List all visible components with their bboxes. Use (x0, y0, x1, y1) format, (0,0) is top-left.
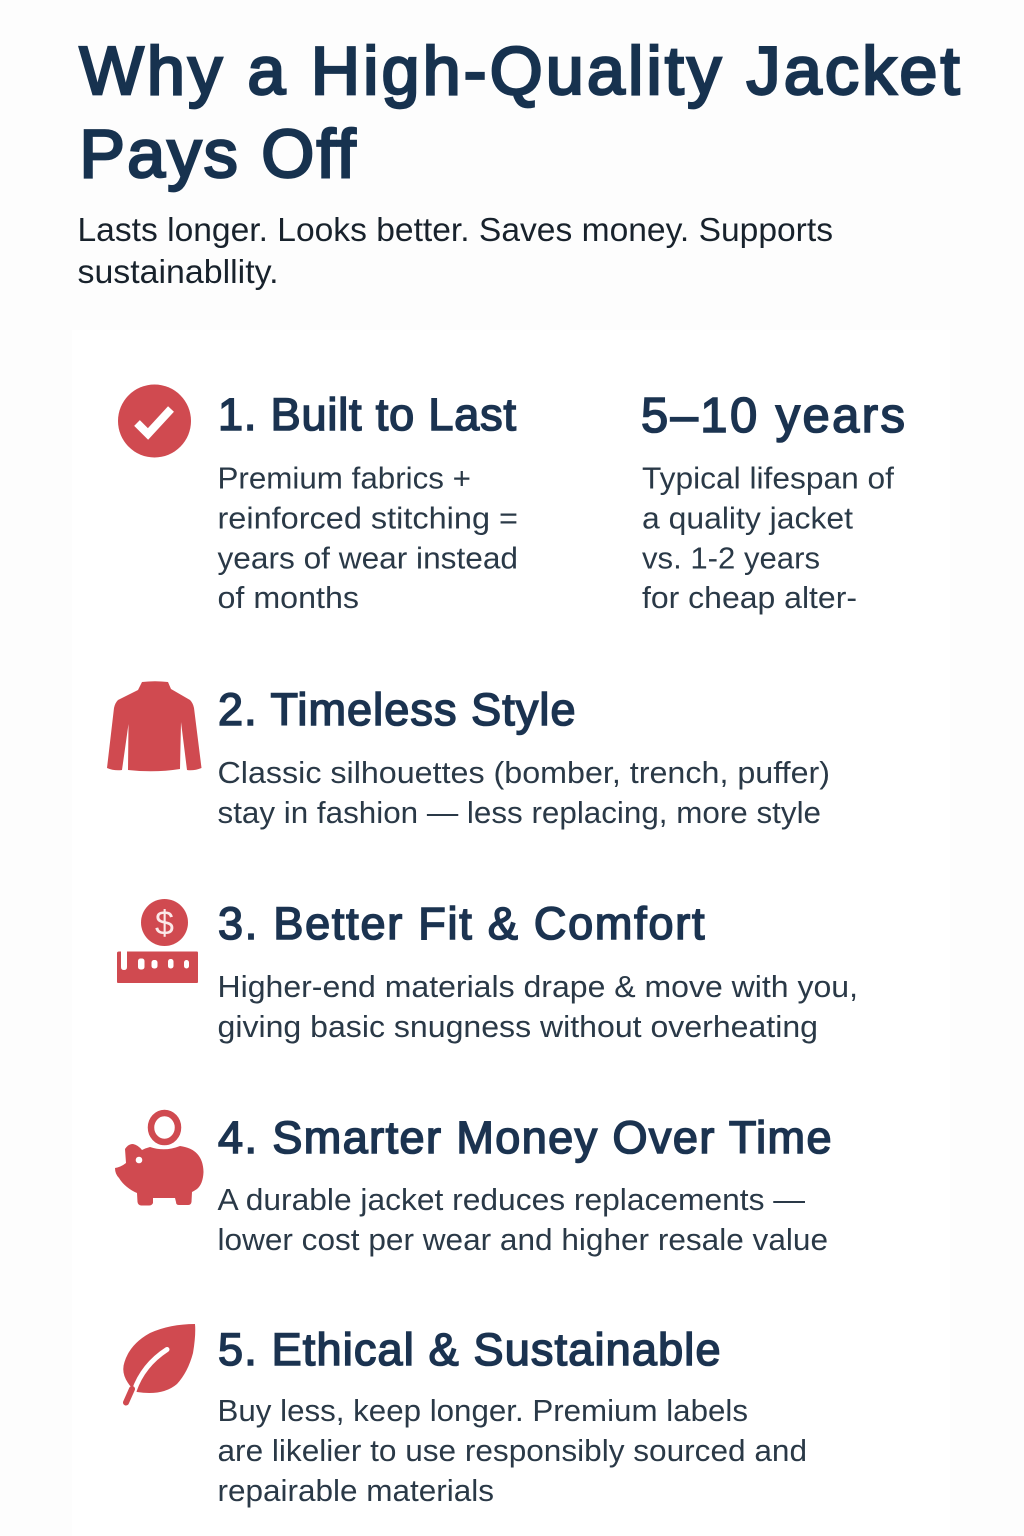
text 2: stay in fashion — less replacing, more style (218, 795, 821, 830)
text 3: giving basic snugness without overheating (218, 1009, 818, 1044)
stat text: for cheap alter- (642, 580, 857, 615)
icon: leaf (123, 1324, 195, 1402)
text 5 (218, 1393, 807, 1508)
text 1: reinforced stitching = (218, 500, 518, 536)
subtitle: Lasts longer. Looks better. Saves money. Supports (78, 211, 833, 248)
section 3: better fit (117, 898, 858, 1044)
panel: benefits (72, 330, 950, 1536)
stat heading: 5–10 years (641, 389, 905, 443)
section 2: timeless style (107, 681, 830, 830)
section 4: smarter money (115, 1112, 832, 1257)
icon: jacket (107, 681, 202, 771)
icon: piggy bank (115, 1113, 204, 1206)
section 5: sustainable (123, 1324, 807, 1508)
text 4: A durable jacket reduces replacements — (218, 1182, 805, 1217)
text 3 (218, 969, 858, 1044)
heading 5: 5. Ethical & Sustainable (218, 1324, 720, 1375)
text 5: are likelier to use responsibly sourced and (218, 1433, 807, 1468)
heading 4: 4. Smarter Money Over Time (218, 1112, 832, 1163)
icon: check circle (118, 384, 191, 458)
text 4: lower cost per wear and higher resale value (218, 1222, 828, 1257)
section 1: built to last (118, 384, 905, 615)
text 1: Premium fabrics + (218, 460, 471, 496)
text 3: Higher-end materials drape & move with you, (218, 969, 858, 1004)
stat text: a quality jacket (642, 500, 853, 536)
icon: dollar and ruler (117, 899, 198, 983)
text 1: years of wear instead (218, 540, 518, 576)
text 2 (218, 755, 830, 830)
stat text: vs. 1-2 years (642, 540, 820, 576)
title: Pays Off (80, 116, 356, 192)
text 1 (218, 460, 518, 615)
text 2: Classic silhouettes (bomber, trench, puffer) (218, 755, 830, 790)
text 4 (218, 1182, 828, 1257)
subtitle (78, 211, 833, 290)
stat text (642, 460, 894, 615)
icon: dollar and ruler: $ (155, 904, 174, 942)
title: Why a High-Quality Jacket (80, 33, 960, 109)
heading 1: 1. Built to Last (218, 389, 516, 440)
title (80, 33, 960, 192)
subtitle: sustainabllity. (78, 253, 278, 290)
text 1: of months (218, 580, 359, 615)
heading 3: 3. Better Fit & Comfort (218, 898, 705, 949)
heading 2: 2. Timeless Style (218, 684, 576, 735)
stat text: Typical lifespan of (642, 460, 894, 496)
text 5: repairable materials (218, 1473, 494, 1508)
text 5: Buy less, keep longer. Premium labels (218, 1393, 748, 1428)
